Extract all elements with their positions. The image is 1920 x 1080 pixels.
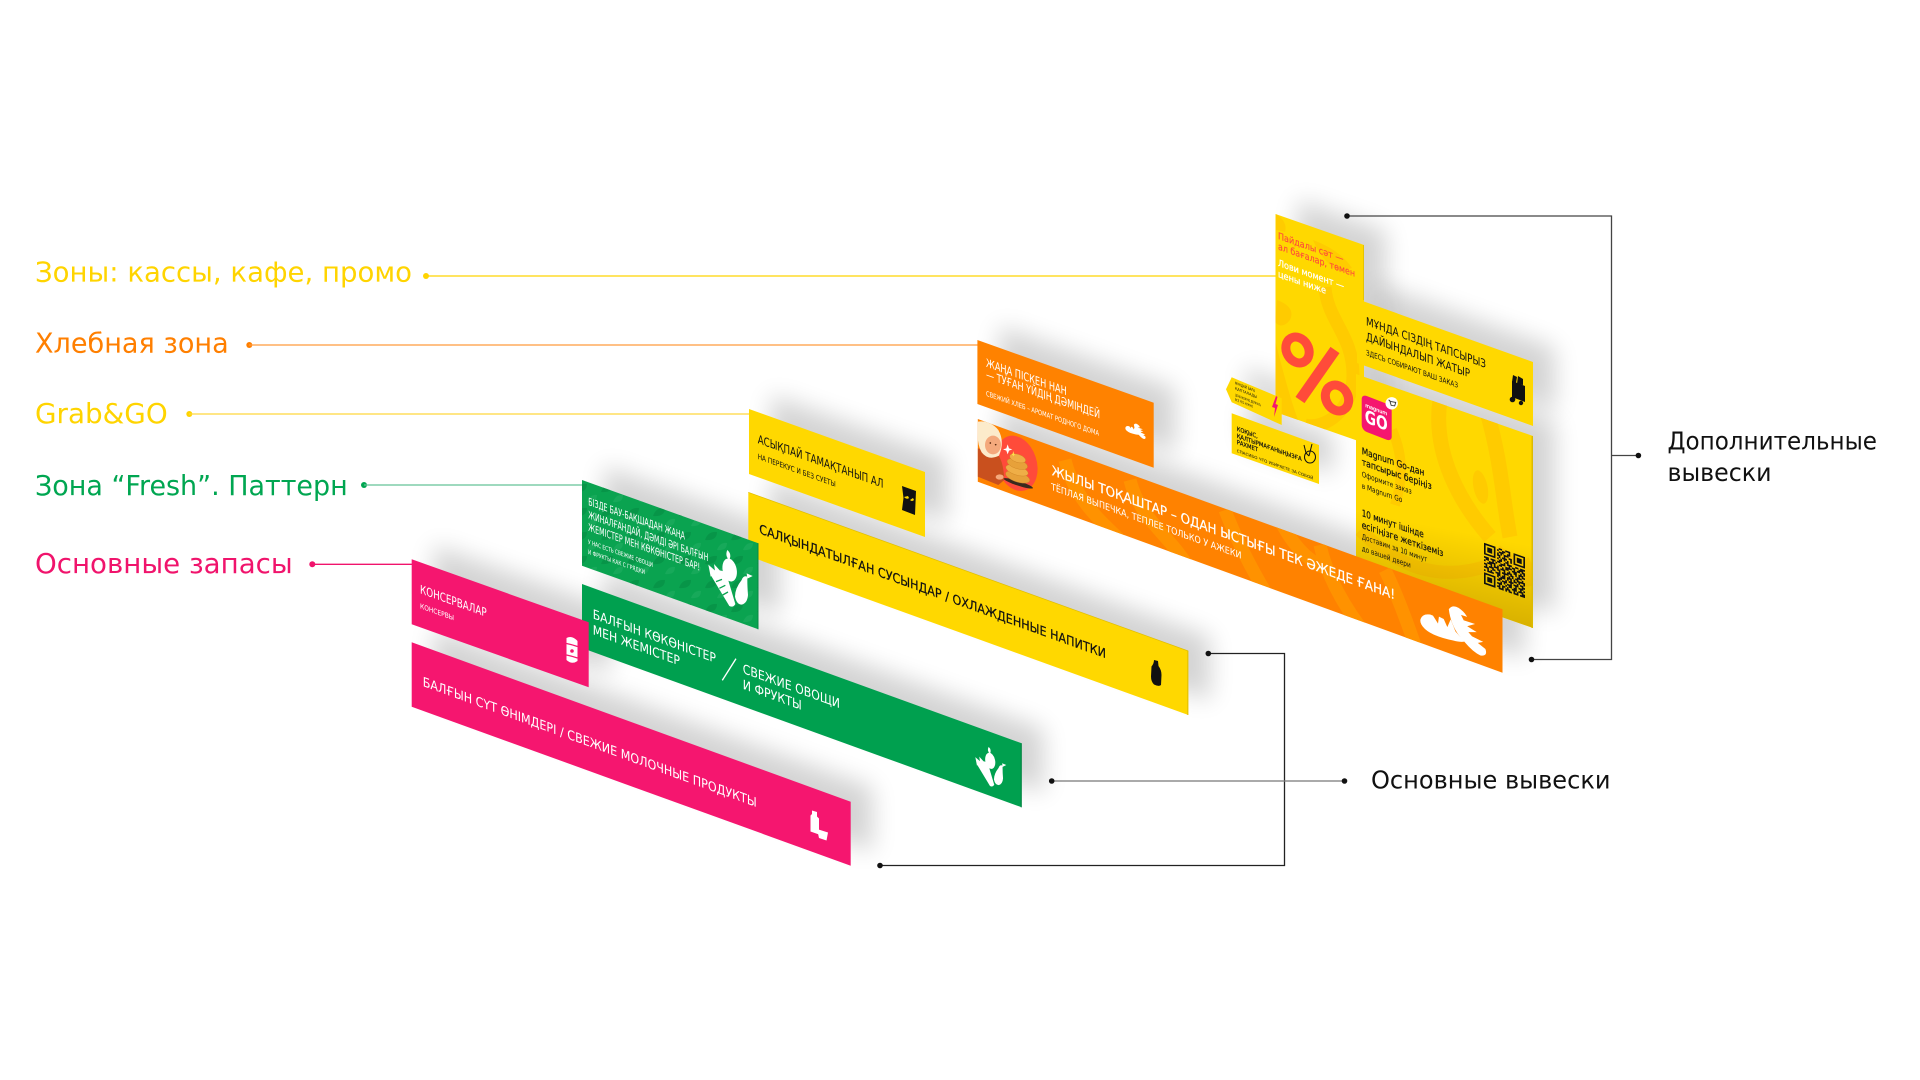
magnum go text: Оформите заказ [1362, 470, 1412, 496]
heading: additional signs: Дополнительные [1668, 426, 1877, 456]
fresh vegetables text [593, 607, 840, 728]
icon: shopping trolley [1510, 375, 1525, 405]
magnum go text: Magnum Go-дан [1362, 446, 1424, 479]
label: bakery zone [35, 328, 978, 360]
fresh pattern text: ЖЕМІСТЕР МЕН КӨКӨНІСТЕР БАР! [588, 521, 700, 574]
label: core stock [35, 548, 412, 580]
panel: order pickup sign [1357, 299, 1533, 426]
icon: small fruit and vegetables [975, 747, 1006, 786]
small tag text: ВСЕ ЧТО НУЖНО [1235, 398, 1253, 409]
thank you text: КОҚЫС, [1237, 426, 1258, 440]
fresh pattern text: У НАС ЕСТЬ СВЕЖИЕ ОВОЩИ [588, 538, 653, 569]
heading: main signs: Основные вывески [1371, 766, 1610, 794]
thank you text: РАХМЕТ [1237, 439, 1258, 454]
fresh vegetables text: МЕН ЖЕМІСТЕР [593, 623, 680, 670]
thank you text: ҚАЛТЫРМАҒАНЫҢЫЗҒА [1237, 433, 1302, 463]
panel: small price tag [1226, 377, 1282, 425]
fresh pattern text [588, 495, 708, 599]
promo text: Лови момент — [1278, 258, 1344, 292]
small tag text: МҰНДАЙ БАҒА [1235, 380, 1255, 393]
warm buns text: ТЁПЛАЯ ВЫПЕЧКА, ТЕПЛЕЕ ТОЛЬКО У АЖЕКИ [1050, 480, 1241, 562]
panel: promo percent sign [1275, 214, 1364, 443]
logo: magnum go [1362, 394, 1398, 442]
icon: can [566, 637, 578, 663]
magnum go text: в Magnum Go [1362, 482, 1402, 505]
panel: grab and go snack sign [749, 409, 925, 537]
snack text: АСЫҚПАЙ ТАМАҚТАНЫП АЛ [758, 431, 883, 491]
label: zones checkout cafe promo [35, 256, 1276, 288]
label: core stock: Основные запасы [35, 548, 293, 580]
icon: victory hand [1304, 444, 1316, 463]
panel: fresh vegetables sign [582, 584, 1022, 807]
icon: milk bottle and cup [810, 810, 828, 840]
connector: main signs middle [1049, 778, 1347, 784]
bracket: additional signs [1344, 213, 1641, 662]
order pickup text: ЗДЕСЬ СОБИРАЮТ ВАШ ЗАКАЗ [1366, 348, 1458, 390]
panel: canned goods sign [412, 559, 589, 687]
canned goods text: КОНСЕРВЫ [420, 601, 454, 622]
canned goods text [420, 583, 487, 634]
bracket: main signs [877, 651, 1284, 868]
icon: percent sign [1281, 333, 1353, 415]
illustration: grandmother with buns [978, 421, 1038, 491]
order pickup text: ДАЙЫНДАЛЫП ЖАТЫР [1366, 329, 1470, 381]
label: fresh zone pattern: Зона “Fresh”. Паттерн [35, 470, 348, 502]
panel: warm buns banner [978, 419, 1502, 673]
dairy text: БАЛҒЫН СҮТ ӨНІМДЕРІ / СВЕЖИЕ МОЛОЧНЫЕ ПРОДУКТЫ [423, 675, 757, 811]
small tag text: ЦЕНА МОЖНО ДЕРЖАТЬ [1235, 393, 1261, 408]
fresh vegetables text: И ФРУКТЫ [743, 678, 802, 714]
fresh bread text: ЖАҢА ПІСКЕН НАН [986, 356, 1067, 398]
fresh pattern text: ЖИНАЛҒАНДАЙ, ДӘМДІ ӘРІ БАЛҒЫН [588, 509, 708, 564]
icon: bottle [1151, 660, 1162, 686]
panel: magnum go sign [1356, 374, 1535, 628]
thank you text: СПАСИБО ЧТО УБИРАЕТЕ ЗА СОБОЙ [1237, 448, 1313, 481]
fresh bread text [986, 356, 1100, 438]
magnum go text: тапсырыс беріңіз [1362, 456, 1432, 492]
icon: large bread [1421, 607, 1486, 655]
thank you text [1237, 426, 1313, 481]
snack text: НА ПЕРЕКУС И БЕЗ СУЕТЫ [758, 452, 836, 489]
label: zones checkout cafe promo: Зоны: кассы, кафе, промо [35, 256, 412, 288]
icon: fruit and vegetables [708, 550, 753, 607]
icon: lightning bolt [1272, 396, 1278, 417]
label: grab and go: Grab&GO [35, 398, 168, 430]
panel: small thank you sign [1232, 413, 1319, 484]
magnum go text: Доставим за 10 минут [1362, 532, 1428, 564]
icon: small bread [1126, 424, 1145, 439]
order pickup text [1366, 314, 1486, 400]
panel: fresh bread sign [977, 340, 1154, 468]
magnum go text: есігіңізге жеткіземіз [1362, 519, 1443, 559]
qr code [1484, 544, 1525, 597]
fresh bread text: СВЕЖИЙ ХЛЕБ – АРОМАТ РОДНОГО ДОМА [986, 389, 1099, 438]
small tag text [1235, 380, 1261, 412]
fresh pattern text: И ФРУКТЫ КАК С ГРЯДКИ [588, 548, 645, 576]
label: bakery zone: Хлебная зона [35, 328, 229, 360]
warm buns text: ЖЫЛЫ ТОҚАШТАР – ОДАН ЫСТЫҒЫ ТЕК ӘЖЕДЕ ҒАНА! [1052, 463, 1395, 603]
canned goods text: КОНСЕРВАЛАР [420, 583, 487, 620]
heading: additional signs [1668, 426, 1877, 487]
promo text: Пайдалы сәт — [1278, 231, 1344, 265]
heading: additional signs: вывески [1668, 458, 1772, 487]
fresh vegetables text: СВЕЖИЕ ОВОЩИ [743, 662, 840, 712]
label: grab and go [35, 398, 750, 430]
panel: fresh pattern sign [582, 480, 758, 629]
magnum go text: до вашей двери [1362, 544, 1411, 570]
promo text: ал бағалар, төмен [1278, 242, 1355, 280]
cold drinks text: САЛҚЫНДАТЫЛҒАН СУСЫНДАР / ОХЛАЖДЕННЫЕ НАПИТКИ [759, 523, 1106, 662]
fresh bread text: — ТУҒАН ҮЙДІҢ ДӘМІНДЕЙ [986, 366, 1100, 421]
logo: magnum go: GO [1365, 407, 1388, 436]
magnum go text: 10 минут ішінде [1362, 507, 1424, 541]
snack text [758, 431, 883, 506]
promo text: цены ниже [1278, 269, 1326, 297]
panel: dairy sign [412, 642, 851, 866]
order pickup text: МҰНДА СІЗДІҢ ТАПСЫРЫЗ [1366, 314, 1486, 371]
small tag text: ҚАПТАЛАДЫ [1235, 386, 1257, 399]
label: fresh zone pattern [35, 470, 583, 502]
promo text [1278, 231, 1355, 307]
infographic canvas [36, 197, 1876, 868]
magnum go text [1362, 446, 1525, 610]
logo: magnum go: magnum [1365, 403, 1387, 417]
fresh vegetables text: БАЛҒЫН КӨКӨНІСТЕР [593, 608, 716, 667]
fresh pattern text: БІЗДЕ БАУ-БАҚШАДАН ЖАҢА [588, 495, 685, 543]
icon: snack bag [902, 486, 916, 515]
panel: cold drinks sign [748, 492, 1188, 715]
